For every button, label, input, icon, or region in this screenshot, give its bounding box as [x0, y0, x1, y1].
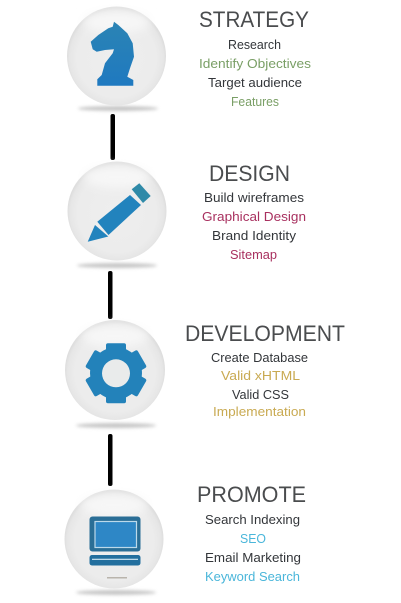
promote list — [205, 512, 301, 584]
promote list: Email Marketing — [205, 550, 301, 565]
heading: strategy: STRATEGY — [199, 7, 309, 32]
icon: promote computer — [64, 490, 164, 595]
development list: Valid CSS — [232, 387, 289, 402]
development list: Create Database — [211, 350, 308, 365]
strategy list: Features — [231, 94, 279, 109]
promote list: Keyword Search — [205, 569, 300, 584]
development list — [211, 350, 308, 419]
strategy list: Identify Objectives — [199, 56, 312, 71]
strategy list: Research — [228, 37, 281, 52]
icon: strategy chess knight — [67, 6, 166, 111]
strategy list — [199, 37, 312, 109]
connector line 2 — [108, 271, 112, 319]
icon: design pencil — [68, 162, 166, 268]
strategy list: Target audience — [208, 75, 302, 90]
development list: Valid xHTML — [221, 368, 300, 383]
connector line 1 — [110, 114, 115, 160]
icon: development gear — [65, 320, 165, 428]
development list: Implementation — [213, 404, 306, 419]
design list: Build wireframes — [204, 190, 305, 205]
design list: Sitemap — [230, 247, 277, 262]
promote list: Search Indexing — [205, 512, 300, 527]
design list: Graphical Design — [202, 209, 306, 224]
heading: promote: PROMOTE — [197, 482, 306, 507]
connector line 3 — [108, 434, 112, 486]
heading: design: DESIGN — [209, 161, 290, 186]
design list: Brand Identity — [212, 228, 297, 243]
promote list: SEO — [240, 531, 266, 546]
heading: development: DEVELOPMENT — [185, 321, 345, 346]
design list — [202, 190, 306, 262]
